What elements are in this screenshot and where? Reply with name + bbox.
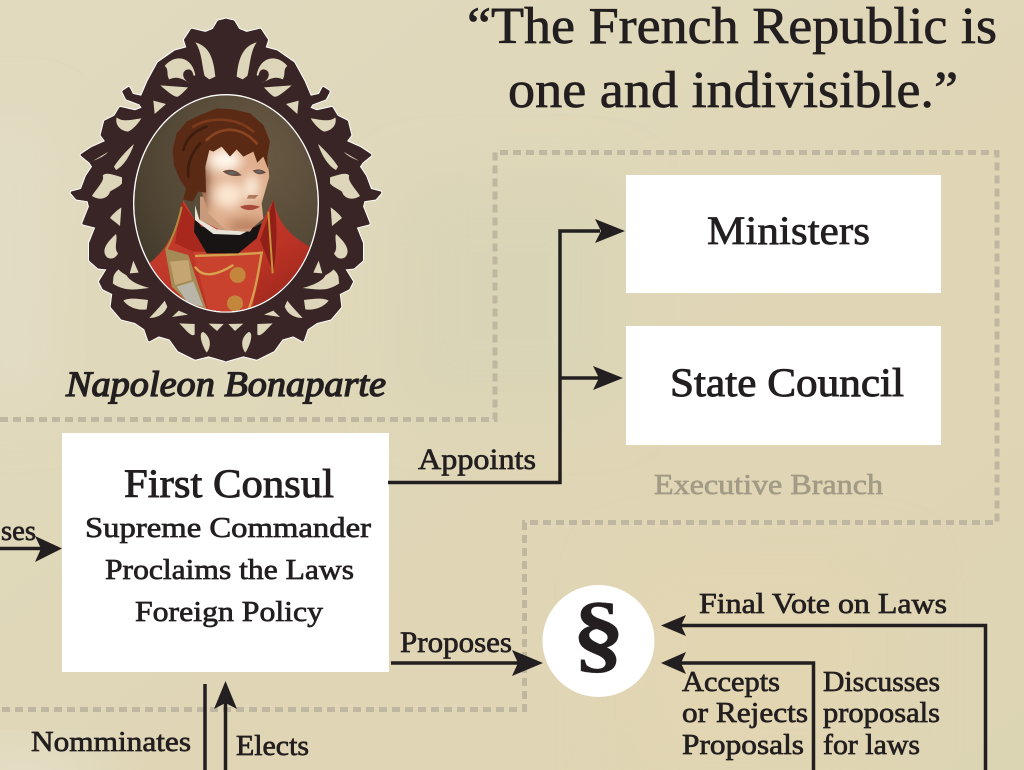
icon: law section sign: §: [572, 584, 625, 682]
label: Discusses proposals for laws: for laws: [823, 729, 920, 761]
label: Appoints: Appoints: [418, 443, 536, 476]
face: [202, 146, 270, 230]
arrow: into First Consul: [0, 536, 62, 562]
hair: [173, 108, 270, 202]
box: Ministers: [626, 175, 941, 293]
title quote: [467, 0, 997, 119]
box: First Consul: First Consul: [124, 461, 334, 506]
arrow: Final Vote on Laws: [661, 615, 986, 770]
label: Discusses proposals for laws: [823, 666, 940, 761]
label: clipped word at left edge: ses: [1, 515, 36, 547]
gold braid: [165, 248, 207, 310]
icon: law section sign: [542, 584, 654, 697]
label: Accepts or Rejects Proposals: Proposals: [682, 729, 804, 761]
line: Nomminates: [203, 684, 207, 770]
box: First Consul: Foreign Policy: [135, 596, 324, 628]
box: State Council: [626, 326, 941, 445]
label: Executive Branch: Executive Branch: [654, 469, 884, 501]
box: First Consul: Proclaims the Laws: [105, 554, 354, 586]
title quote: one and indivisible.”: [508, 62, 958, 119]
label: Elects: Elects: [236, 730, 309, 762]
arrow: Accepts or Rejects Proposals: [661, 652, 814, 770]
frame outer ornament: [72, 20, 380, 360]
label: Proposes: Proposes: [400, 626, 512, 659]
arrow: Elects: [214, 681, 237, 770]
coat: [145, 200, 313, 317]
icon: Napoleon portrait in ornate frame: [72, 20, 380, 360]
Napoleon Bonaparte caption: Napoleon Bonaparte: [65, 364, 386, 404]
neck: [200, 196, 253, 232]
box: First Consul: [62, 433, 389, 672]
dashed branch boundaries: [0, 152, 997, 710]
box: Ministers: Ministers: [707, 208, 870, 253]
label: Discusses proposals for laws: proposals: [823, 697, 940, 729]
box: State Council: State Council: [670, 360, 904, 405]
box: First Consul: Supreme Commander: [85, 512, 371, 544]
eyes and mouth: [223, 170, 242, 176]
label: Nomminates: Nomminates: [31, 726, 191, 758]
label: Final Vote on Laws: Final Vote on Laws: [699, 588, 947, 620]
portrait: [133, 94, 319, 313]
arrow: Appoints to Ministers and State Council: [388, 219, 625, 482]
label: Accepts or Rejects Proposals: Accepts: [682, 666, 780, 698]
label: Discusses proposals for laws: Discusses: [823, 666, 940, 698]
stock: [194, 218, 262, 253]
label: Accepts or Rejects Proposals: [682, 666, 808, 761]
label: Accepts or Rejects Proposals: or Rejects: [682, 697, 808, 729]
arrow: Proposes to law: [391, 650, 543, 676]
